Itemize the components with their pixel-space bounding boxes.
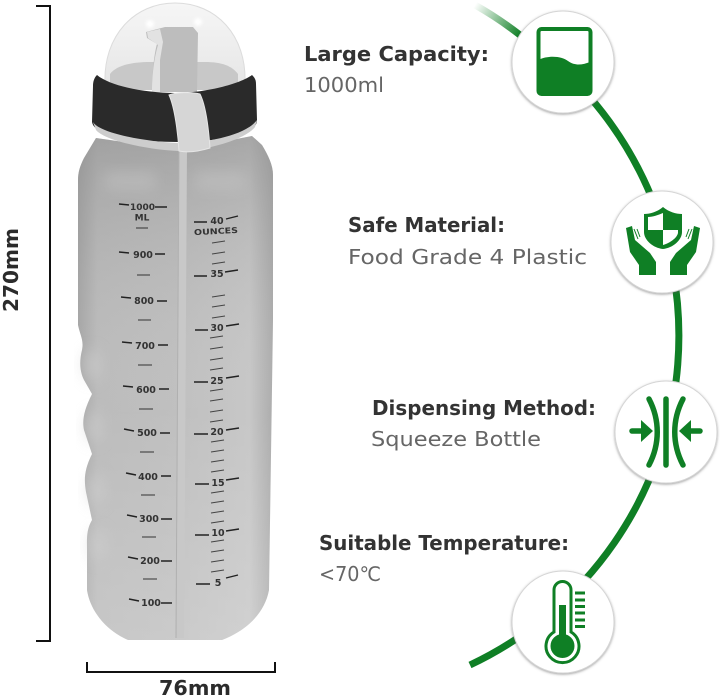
- ounces scale: 5: [215, 578, 221, 589]
- green connecting arc: [470, 5, 679, 665]
- ml scale: 500: [137, 428, 157, 439]
- ounces scale: 30: [210, 323, 224, 334]
- ounces scale: [194, 216, 239, 589]
- ml scale: 300: [139, 514, 159, 525]
- ml scale: 100: [141, 598, 161, 609]
- feature: dispensing method: [371, 396, 596, 451]
- ml scale: 1000: [130, 203, 155, 213]
- ml scale: 600: [136, 385, 156, 396]
- ml scale: 800: [134, 296, 154, 307]
- icon: squeeze arrows: [615, 381, 717, 483]
- feature: suitable temperature: [319, 531, 569, 586]
- ml scale: 400: [138, 472, 158, 483]
- icon: thermometer: [512, 571, 614, 673]
- ounces scale: OUNCES: [194, 226, 238, 237]
- water bottle: [78, 3, 273, 640]
- ml scale: 900: [133, 250, 153, 261]
- ounces scale: 20: [210, 427, 224, 438]
- bottle dome lid: [105, 3, 245, 92]
- ounces scale: 35: [210, 269, 224, 280]
- ml scale: [119, 203, 172, 609]
- ml scale: ML: [135, 214, 150, 224]
- dimension: height bracket: [0, 6, 50, 641]
- value: squeeze bottle: Squeeze Bottle: [371, 427, 541, 451]
- heading: dispensing method: Dispensing Method:: [372, 396, 596, 420]
- value: 1000ml: 1000ml: [304, 73, 384, 97]
- ml scale: 700: [135, 341, 155, 352]
- ounces scale: 10: [211, 528, 225, 539]
- ounces scale: 15: [211, 478, 225, 489]
- ounces scale: 40: [210, 216, 224, 227]
- heading: suitable temperature: Suitable Temperature:: [319, 531, 569, 555]
- ounces scale: 25: [210, 376, 224, 387]
- feature: large capacity: [304, 42, 489, 97]
- black screw ring: [92, 75, 257, 151]
- heading: safe material: Safe Material:: [348, 213, 505, 237]
- strap: [169, 93, 210, 152]
- value: under 70 C: <70℃: [319, 562, 381, 586]
- icon: shield and hands: [611, 191, 713, 293]
- bottle body: [78, 136, 273, 640]
- ml scale: 200: [140, 556, 160, 567]
- value: food grade: Food Grade 4 Plastic: [348, 245, 587, 269]
- icon: water container: [512, 11, 614, 113]
- dimension: width bracket: [87, 662, 275, 698]
- heading: large capacity: Large Capacity:: [304, 42, 489, 66]
- feature: safe material: [348, 213, 587, 269]
